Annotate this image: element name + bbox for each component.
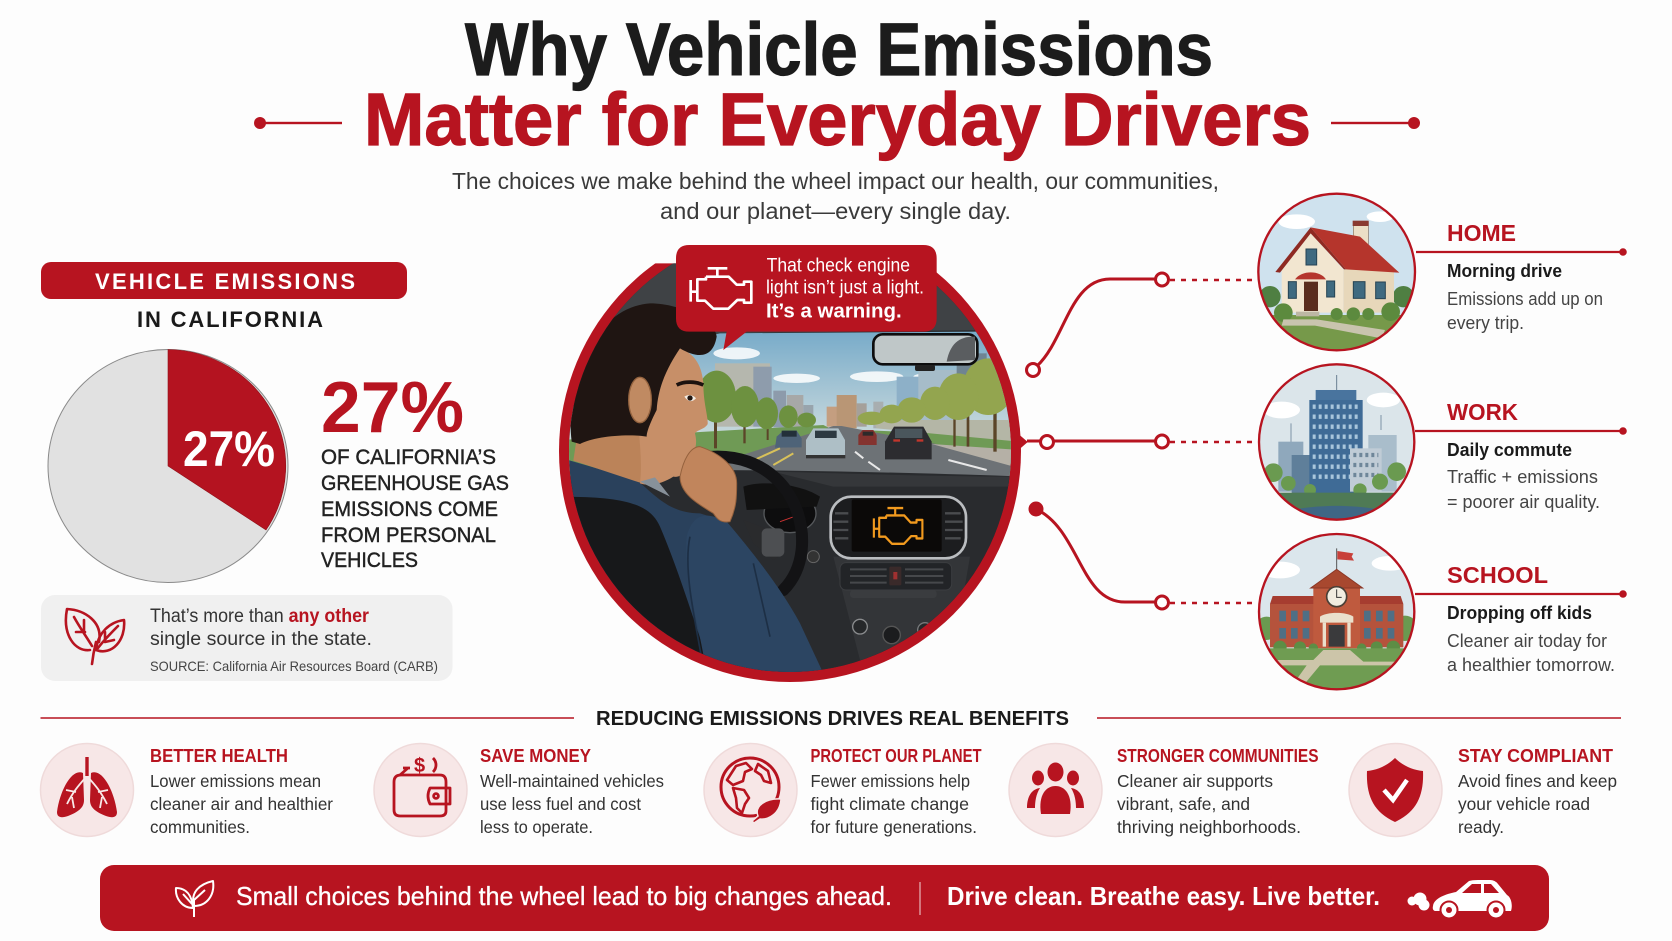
connector: driver to work <box>1020 435 1257 448</box>
benefit: protect our planet: for future generations. <box>810 817 977 837</box>
icon: engine warning <box>691 268 751 309</box>
subtitle <box>452 168 1219 224</box>
icon: lungs <box>57 757 117 817</box>
subtitle: The choices we make behind the wheel impact our health, our communities, <box>452 168 1219 194</box>
text: home: Morning drive <box>1447 261 1562 281</box>
speech bubble: That check engine <box>767 256 910 277</box>
statistic description: OF CALIFORNIA’S <box>321 446 496 469</box>
text: work <box>1415 399 1627 512</box>
benefit: stronger communities: vibrant, safe, and <box>1117 794 1250 814</box>
illustration: school <box>1253 530 1420 693</box>
statistic description: VEHICLES <box>321 549 418 572</box>
statistic description: GREENHOUSE GAS <box>321 472 509 495</box>
benefit: stay compliant <box>1349 744 1617 837</box>
pie chart <box>48 350 288 582</box>
speech bubble: It’s a warning. <box>766 300 902 322</box>
icon: globe with leaf <box>721 758 781 823</box>
panel: driver illustration <box>559 220 1027 687</box>
icon: wallet: $ <box>414 755 425 777</box>
man: hand <box>680 447 737 522</box>
statistic description: FROM PERSONAL <box>321 524 496 547</box>
bottom banner <box>100 865 1549 931</box>
icon: people <box>1027 762 1084 814</box>
benefit: save money: Well-maintained vehicles <box>480 771 664 791</box>
benefit: save money <box>374 744 664 837</box>
bottom banner: Drive clean. Breathe easy. Live better. <box>947 881 1380 911</box>
text: home <box>1416 220 1627 333</box>
speech bubble <box>676 245 937 350</box>
red ring <box>559 220 1021 682</box>
text: home: HOME <box>1447 220 1516 246</box>
icon: amber engine light <box>874 508 922 544</box>
lower console <box>807 551 952 644</box>
icon: leaves <box>176 881 213 917</box>
icon: shield <box>1367 758 1423 822</box>
benefit: protect our planet: PROTECT OUR PLANET <box>810 746 982 766</box>
connector: driver to home <box>1026 273 1257 376</box>
heading pill: VEHICLE EMISSIONS <box>95 269 355 294</box>
text: school <box>1415 562 1627 675</box>
source callout <box>41 595 452 681</box>
man: head <box>570 303 717 497</box>
title: Why Vehicle Emissions <box>465 8 1213 91</box>
benefit: protect our planet: fight climate change <box>810 794 969 814</box>
title decoration right <box>1331 117 1420 129</box>
benefit: stronger communities: STRONGER COMMUNITIES <box>1117 746 1318 766</box>
traffic cars <box>775 427 932 459</box>
benefit: better health: cleaner air and healthier <box>150 794 333 814</box>
benefit: stay compliant: Avoid fines and keep <box>1458 771 1617 791</box>
text: work: Daily commute <box>1447 440 1572 460</box>
illustration: home <box>1253 190 1420 355</box>
statistic description: EMISSIONS COME <box>321 498 498 521</box>
steering wheel <box>705 457 802 590</box>
icon: wallet <box>394 755 450 816</box>
connector: driver to school <box>1029 502 1257 609</box>
title decoration left <box>254 117 342 129</box>
benefit: better health: Lower emissions mean <box>150 771 321 791</box>
icon: car with exhaust <box>1408 880 1512 918</box>
dashboard <box>570 470 1010 672</box>
text: home: every trip. <box>1447 313 1524 333</box>
man: seat and jacket <box>569 460 822 672</box>
text: work: Traffic + emissions <box>1447 467 1598 487</box>
benefit: stay compliant: your vehicle road <box>1458 794 1590 814</box>
benefit: save money: use less fuel and cost <box>480 794 641 814</box>
benefit: better health: communities. <box>150 817 250 837</box>
pie chart: 27% <box>183 421 275 477</box>
icon: leaves <box>66 609 124 664</box>
source callout: That’s more than any other <box>150 606 370 627</box>
text: school: a healthier tomorrow. <box>1447 655 1615 675</box>
benefit: protect our planet: Fewer emissions help <box>810 771 970 791</box>
benefit: better health: BETTER HEALTH <box>150 746 288 766</box>
scene inside ring <box>569 263 1011 672</box>
text: school: Cleaner air today for <box>1447 631 1607 651</box>
subtitle: and our planet—every single day. <box>660 198 1011 224</box>
panel: vehicle emissions in California <box>41 262 509 681</box>
benefit: stay compliant: STAY COMPLIANT <box>1458 746 1613 766</box>
statistic description <box>321 446 509 572</box>
benefit: save money: SAVE MONEY <box>480 746 591 766</box>
benefit: better health <box>40 744 333 837</box>
rear-view mirror <box>873 334 977 371</box>
big statistic: 27% <box>321 368 464 448</box>
source callout: SOURCE: California Air Resources Board (CARB) <box>150 658 438 674</box>
benefits heading: REDUCING EMISSIONS DRIVES REAL BENEFITS <box>596 708 1069 730</box>
speech bubble: light isn’t just a light. <box>766 277 924 298</box>
title <box>364 8 1311 161</box>
benefit: save money: less to operate. <box>480 817 593 837</box>
center screen <box>831 497 966 558</box>
illustration: work <box>1253 360 1420 526</box>
title: Matter for Everyday Drivers <box>364 78 1311 161</box>
benefit: stronger communities <box>1009 744 1318 837</box>
benefit: stay compliant: ready. <box>1458 817 1504 837</box>
text: work: = poorer air quality. <box>1447 492 1600 512</box>
subheading: IN CALIFORNIA <box>137 307 323 332</box>
benefit: protect our planet <box>704 744 982 837</box>
text: school: SCHOOL <box>1447 562 1548 588</box>
source callout: single source in the state. <box>150 629 372 650</box>
benefit: stronger communities: Cleaner air supports <box>1117 771 1273 791</box>
text: home: Emissions add up on <box>1447 289 1603 309</box>
heading pill <box>41 262 407 299</box>
benefit: stronger communities: thriving neighborhoods. <box>1117 817 1301 837</box>
bottom banner: Small choices behind the wheel lead to big changes ahead. <box>236 881 892 911</box>
text: work: WORK <box>1447 399 1518 425</box>
instrument cluster <box>743 483 820 533</box>
text: school: Dropping off kids <box>1447 603 1592 623</box>
